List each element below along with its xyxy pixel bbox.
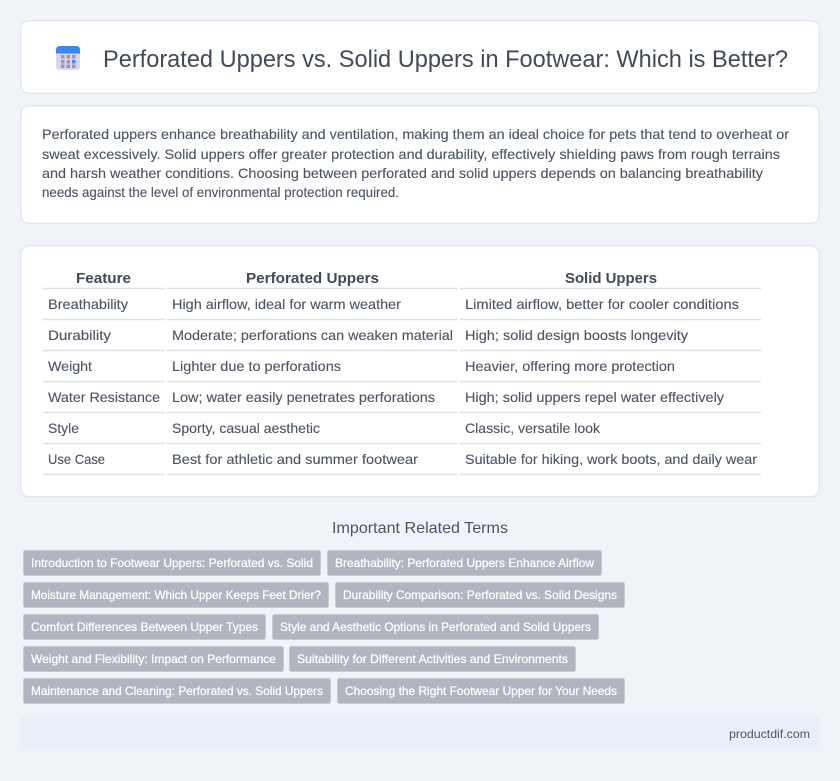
heading: important related terms: Important Related Terms [332, 520, 508, 537]
row: breathability: Limited airflow, better for cooler conditions [465, 296, 739, 312]
tag: introduction: Introduction to Footwear Uppers: Perforated vs. Solid [31, 556, 313, 570]
tag: comfort: Comfort Differences Between Upper Types [31, 620, 258, 634]
row: style: Style [48, 420, 79, 436]
row: breathability [48, 296, 739, 312]
panel: introduction [21, 106, 819, 223]
intro text: Perforated uppers enhance breathability and ventilation, making them an ideal choice for pets that tend to overheat or [42, 126, 789, 142]
row: water resistance [48, 389, 724, 405]
intro text [42, 126, 789, 200]
tag: style: Style and Aesthetic Options in Perforated and Solid Uppers [280, 620, 591, 634]
tag: moisture [24, 582, 328, 608]
row: durability: Moderate; perforations can weaken material [172, 327, 453, 343]
row: breathability: Breathability [48, 296, 128, 312]
row: use case [48, 451, 757, 467]
tag: choosing: Choosing the Right Footwear Upper for Your Needs [345, 684, 617, 698]
row: water resistance: High; solid uppers repel water effectively [465, 389, 724, 405]
tag: suitability [290, 646, 576, 672]
title: Perforated Uppers vs. Solid Uppers in Footwear: Which is Better? [103, 46, 788, 73]
panel: header [21, 21, 819, 93]
panel: comparison table [21, 246, 819, 497]
tag: breathability [328, 550, 602, 576]
row: use case: Best for athletic and summer footwear [172, 451, 418, 467]
row: durability: High; solid design boosts longevity [465, 327, 688, 343]
footer bar [20, 717, 820, 751]
tag: moisture: Moisture Management: Which Upper Keeps Feet Drier? [31, 588, 321, 602]
tag: weight [24, 646, 284, 672]
footer source text: productdif.com [729, 727, 810, 741]
table header: Feature [76, 270, 131, 287]
intro text: sweat excessively. Solid uppers offer greater protection and durability, effectively shielding paws from rough terrains [42, 146, 780, 162]
row: weight: Lighter due to perforations [172, 358, 341, 374]
row: use case: Suitable for hiking, work boots, and daily wear [465, 451, 757, 467]
row: weight: Weight [48, 358, 92, 374]
tag: maintenance [24, 678, 330, 704]
table header: Solid Uppers [565, 270, 657, 287]
tag: weight: Weight and Flexibility: Impact on Performance [31, 652, 276, 666]
row: weight: Heavier, offering more protection [465, 358, 675, 374]
tag: comfort [24, 614, 266, 640]
intro text: and harsh weather conditions. Choosing between perforated and solid uppers depends on balancing breathability [42, 165, 763, 181]
intro text: needs against the level of environmental protection required. [42, 184, 399, 200]
icon: calendar grid [56, 46, 80, 70]
tag: suitability: Suitability for Different Activities and Environments [297, 652, 568, 666]
tag: durability: Durability Comparison: Perforated vs. Solid Designs [343, 588, 617, 602]
row: breathability: High airflow, ideal for warm weather [172, 296, 401, 312]
tag: style [272, 614, 598, 640]
row: water resistance: Water Resistance [48, 389, 160, 405]
row: water resistance: Low; water easily penetrates perforations [172, 389, 435, 405]
row: weight [48, 358, 675, 374]
row: use case: Use Case [48, 451, 105, 467]
related term tags [24, 550, 624, 704]
row: style: Classic, versatile look [465, 420, 601, 436]
tag: choosing [338, 678, 624, 704]
row: style: Sporty, casual aesthetic [172, 420, 320, 436]
table header: Perforated Uppers [246, 270, 379, 287]
tag: durability [336, 582, 624, 608]
tag: maintenance: Maintenance and Cleaning: Perforated vs. Solid Uppers [31, 684, 323, 698]
table header [76, 270, 657, 287]
row: durability: Durability [48, 327, 111, 343]
tag: introduction [24, 550, 320, 576]
row: durability [48, 327, 688, 343]
tag: breathability: Breathability: Perforated Uppers Enhance Airflow [335, 556, 594, 570]
row: style [48, 420, 601, 436]
